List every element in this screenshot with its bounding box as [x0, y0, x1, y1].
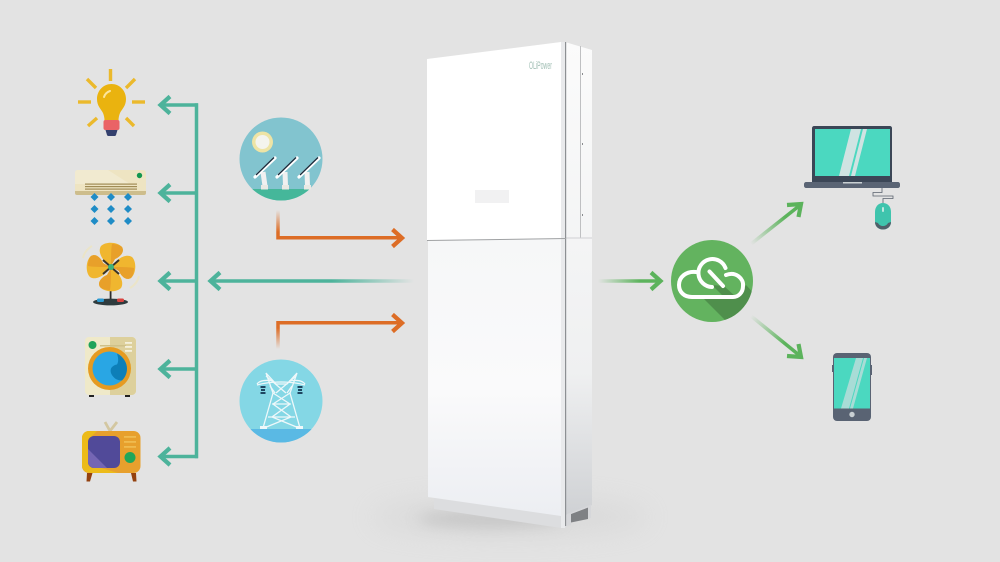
arrow: battery to cloud [598, 272, 660, 290]
icon: air conditioner [75, 170, 146, 225]
arrow: to fan [160, 272, 198, 290]
plinth [434, 498, 567, 528]
arrow: to air conditioner [160, 184, 198, 202]
arrow: to light bulb [160, 96, 198, 114]
floor shadow [370, 497, 650, 537]
icon: fan [83, 243, 139, 305]
icon: cloud [671, 240, 753, 322]
icon: solar panels [240, 118, 322, 200]
icon: mouse [873, 188, 893, 230]
battery storage unit [370, 42, 650, 537]
icon: power grid tower [240, 360, 322, 442]
arrow: cloud to laptop [751, 204, 801, 244]
arrow: to washing machine [160, 360, 198, 378]
front panel lower [428, 239, 561, 516]
icon: washing machine [85, 337, 136, 397]
front panel upper [427, 42, 561, 241]
arrow: to television [160, 448, 198, 465]
module divider [427, 238, 566, 240]
icon: television [82, 422, 140, 482]
icon: smartphone [832, 353, 872, 421]
front edge [561, 42, 566, 528]
arrow: grid to battery [278, 314, 402, 349]
battery storage unit: OLiPower [529, 60, 552, 72]
arrow: cloud to phone [751, 316, 801, 357]
icon: laptop [804, 126, 900, 188]
arrow: solar to battery [278, 210, 402, 246]
icon: light bulb [78, 69, 145, 136]
display window [475, 190, 509, 203]
side panel [565, 42, 592, 526]
arrow: battery output to loads [210, 272, 414, 290]
arrow: load distribution bus [160, 96, 198, 465]
